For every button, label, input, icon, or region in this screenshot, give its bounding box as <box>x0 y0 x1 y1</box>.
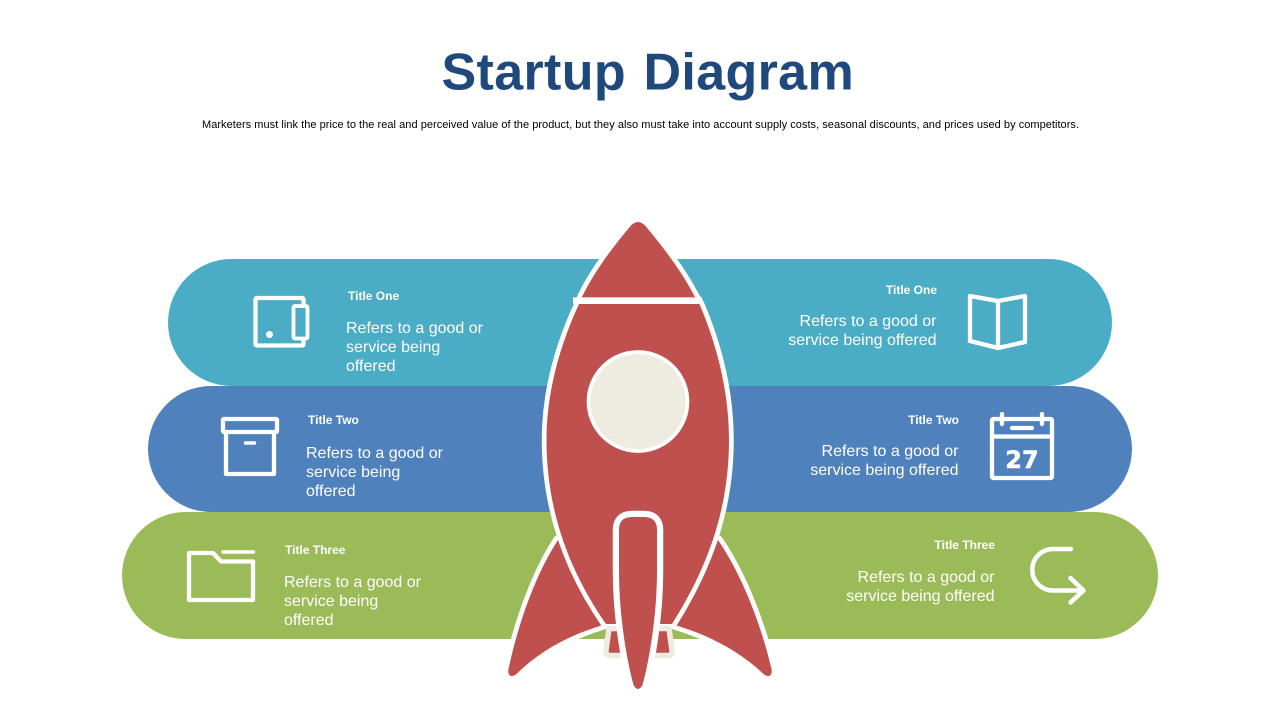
rocket left fin <box>508 540 620 676</box>
text: right title one: service being offered <box>788 332 936 349</box>
rocket <box>508 222 772 689</box>
text: left title one: service being <box>346 339 440 356</box>
title: Startup <box>442 44 626 102</box>
text: left title two <box>306 413 444 500</box>
subtitle text: Marketers must link the price to the real and perceived value of the product, but they also must take into account supply costs, seasonal discounts, and prices used by competitors. <box>202 119 1079 131</box>
text: left title two: offered <box>306 483 356 500</box>
rocket body <box>546 222 729 624</box>
text: left title two: Refers to a good or <box>306 445 444 462</box>
panel: teal band <box>168 259 1112 386</box>
icon: open book <box>970 296 1025 348</box>
text: right title two: Title Two <box>908 413 959 427</box>
icon: folder <box>189 552 254 600</box>
rocket nozzle <box>606 628 672 656</box>
text: right title one: Title One <box>886 283 937 297</box>
text: right title three <box>846 538 995 605</box>
text: left title three <box>284 543 422 629</box>
panel: blue band <box>148 386 1132 512</box>
panel: green band <box>122 512 1158 639</box>
rocket nose band <box>573 297 702 304</box>
text: left title one <box>346 289 484 375</box>
text: left title two: Title Two <box>308 413 359 427</box>
text: left title three: Refers to a good or <box>284 574 422 591</box>
text: left title three: offered <box>284 612 334 629</box>
rocket window <box>588 352 688 451</box>
text: left title three: service being <box>284 593 378 610</box>
text: left title three: Title Three <box>285 543 346 557</box>
text: right title two: Refers to a good or <box>822 443 959 460</box>
text: right title one: Refers to a good or <box>800 313 937 330</box>
text: right title three: service being offered <box>846 588 994 605</box>
text: left title two: service being <box>306 464 400 481</box>
text: right title three: Title Three <box>935 538 995 552</box>
icon: tablet <box>256 298 308 346</box>
icon: box <box>223 419 277 474</box>
text: left title one: Refers to a good or <box>346 320 484 337</box>
text: right title one <box>788 283 937 349</box>
title: Diagram <box>644 44 854 102</box>
text: right title three: Refers to a good or <box>858 569 995 586</box>
text: left title one: offered <box>346 358 396 375</box>
icon: return arrow <box>1032 549 1084 602</box>
text: right title two <box>810 413 959 479</box>
icon: calendar: 27 <box>1005 446 1039 474</box>
icon: calendar <box>992 414 1052 478</box>
rocket right fin <box>660 540 772 676</box>
text: left title one: Title One <box>348 289 399 303</box>
rocket centre fin <box>619 517 657 689</box>
text: right title two: service being offered <box>810 462 958 479</box>
